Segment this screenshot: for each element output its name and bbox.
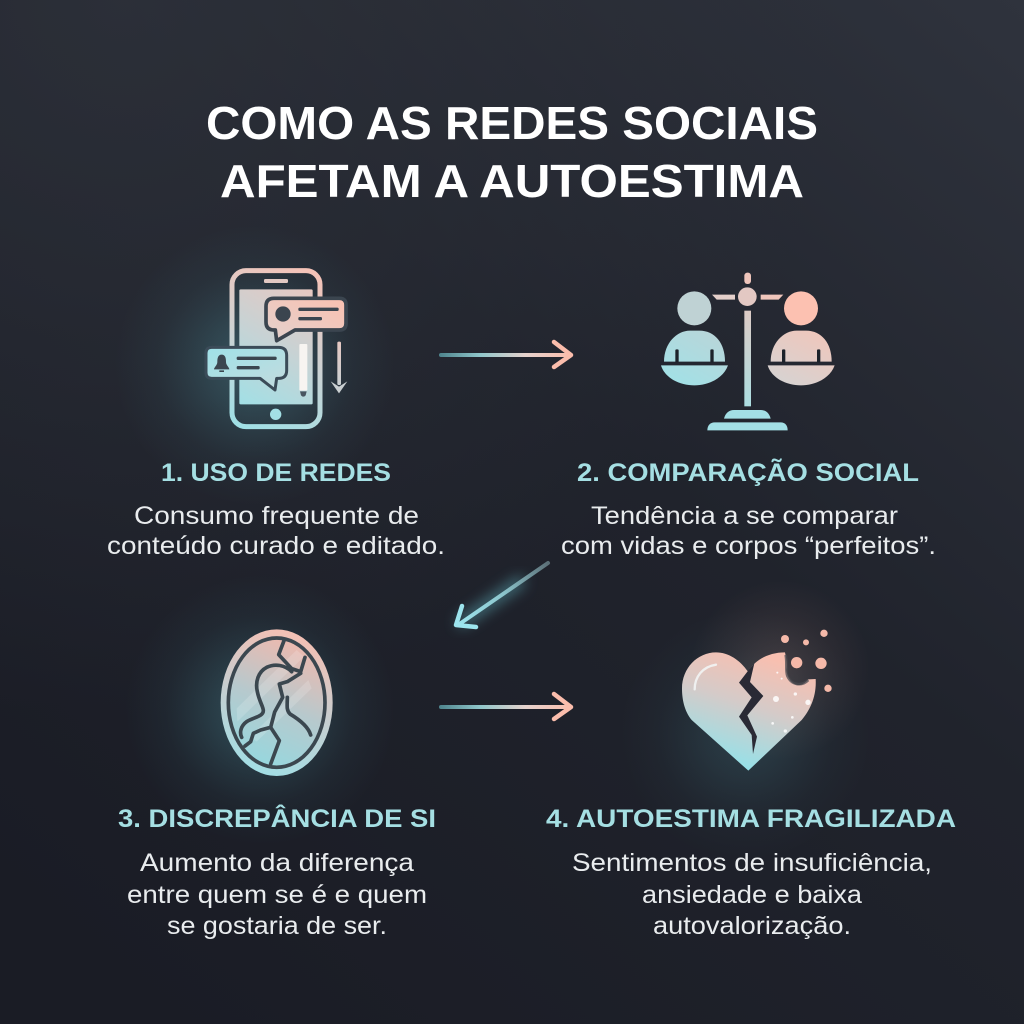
heading: 3. DISCREPÂNCIA DE SI [118,803,436,833]
title: COMO AS REDES SOCIAIS [206,97,818,149]
heading: 2. COMPARAÇÃO SOCIAL [577,457,919,487]
panel: step 4 [546,630,956,940]
description [107,502,445,560]
heading: 1. USO DE REDES [161,459,391,487]
description [572,849,932,940]
title [206,97,818,207]
description: se gostaria de ser. [167,912,387,940]
description: Consumo frequente de [134,502,419,530]
description: ansiedade e baixa [642,881,862,909]
title: AFETAM A AUTOESTIMA [220,155,804,207]
description [127,849,427,940]
arrow: step 3 to 4 [441,694,571,719]
icon: broken heart with particles [682,630,832,771]
description [561,502,936,560]
arrow: step 2 to 3 [456,563,548,627]
description: Aumento da diferença [140,849,414,877]
icon: balance scale comparing two people [661,273,835,430]
description: autovalorização. [653,912,851,940]
heading: 4. AUTOESTIMA FRAGILIZADA [546,805,956,833]
icon: smartphone with chat bubbles [206,271,347,427]
description: Tendência a se comparar [591,502,898,530]
panel: step 3 [118,629,436,940]
panel: step 1 [107,271,445,560]
arrow: step 1 to 2 [441,342,571,367]
description: conteúdo curado e editado. [107,532,445,560]
panel: step 2 [561,273,936,560]
description: Sentimentos de insuficiência, [572,849,932,877]
description: entre quem se é e quem [127,881,427,909]
description: com vidas e corpos “perfeitos”. [561,532,936,560]
icon: cracked mirror with silhouette [221,629,333,776]
